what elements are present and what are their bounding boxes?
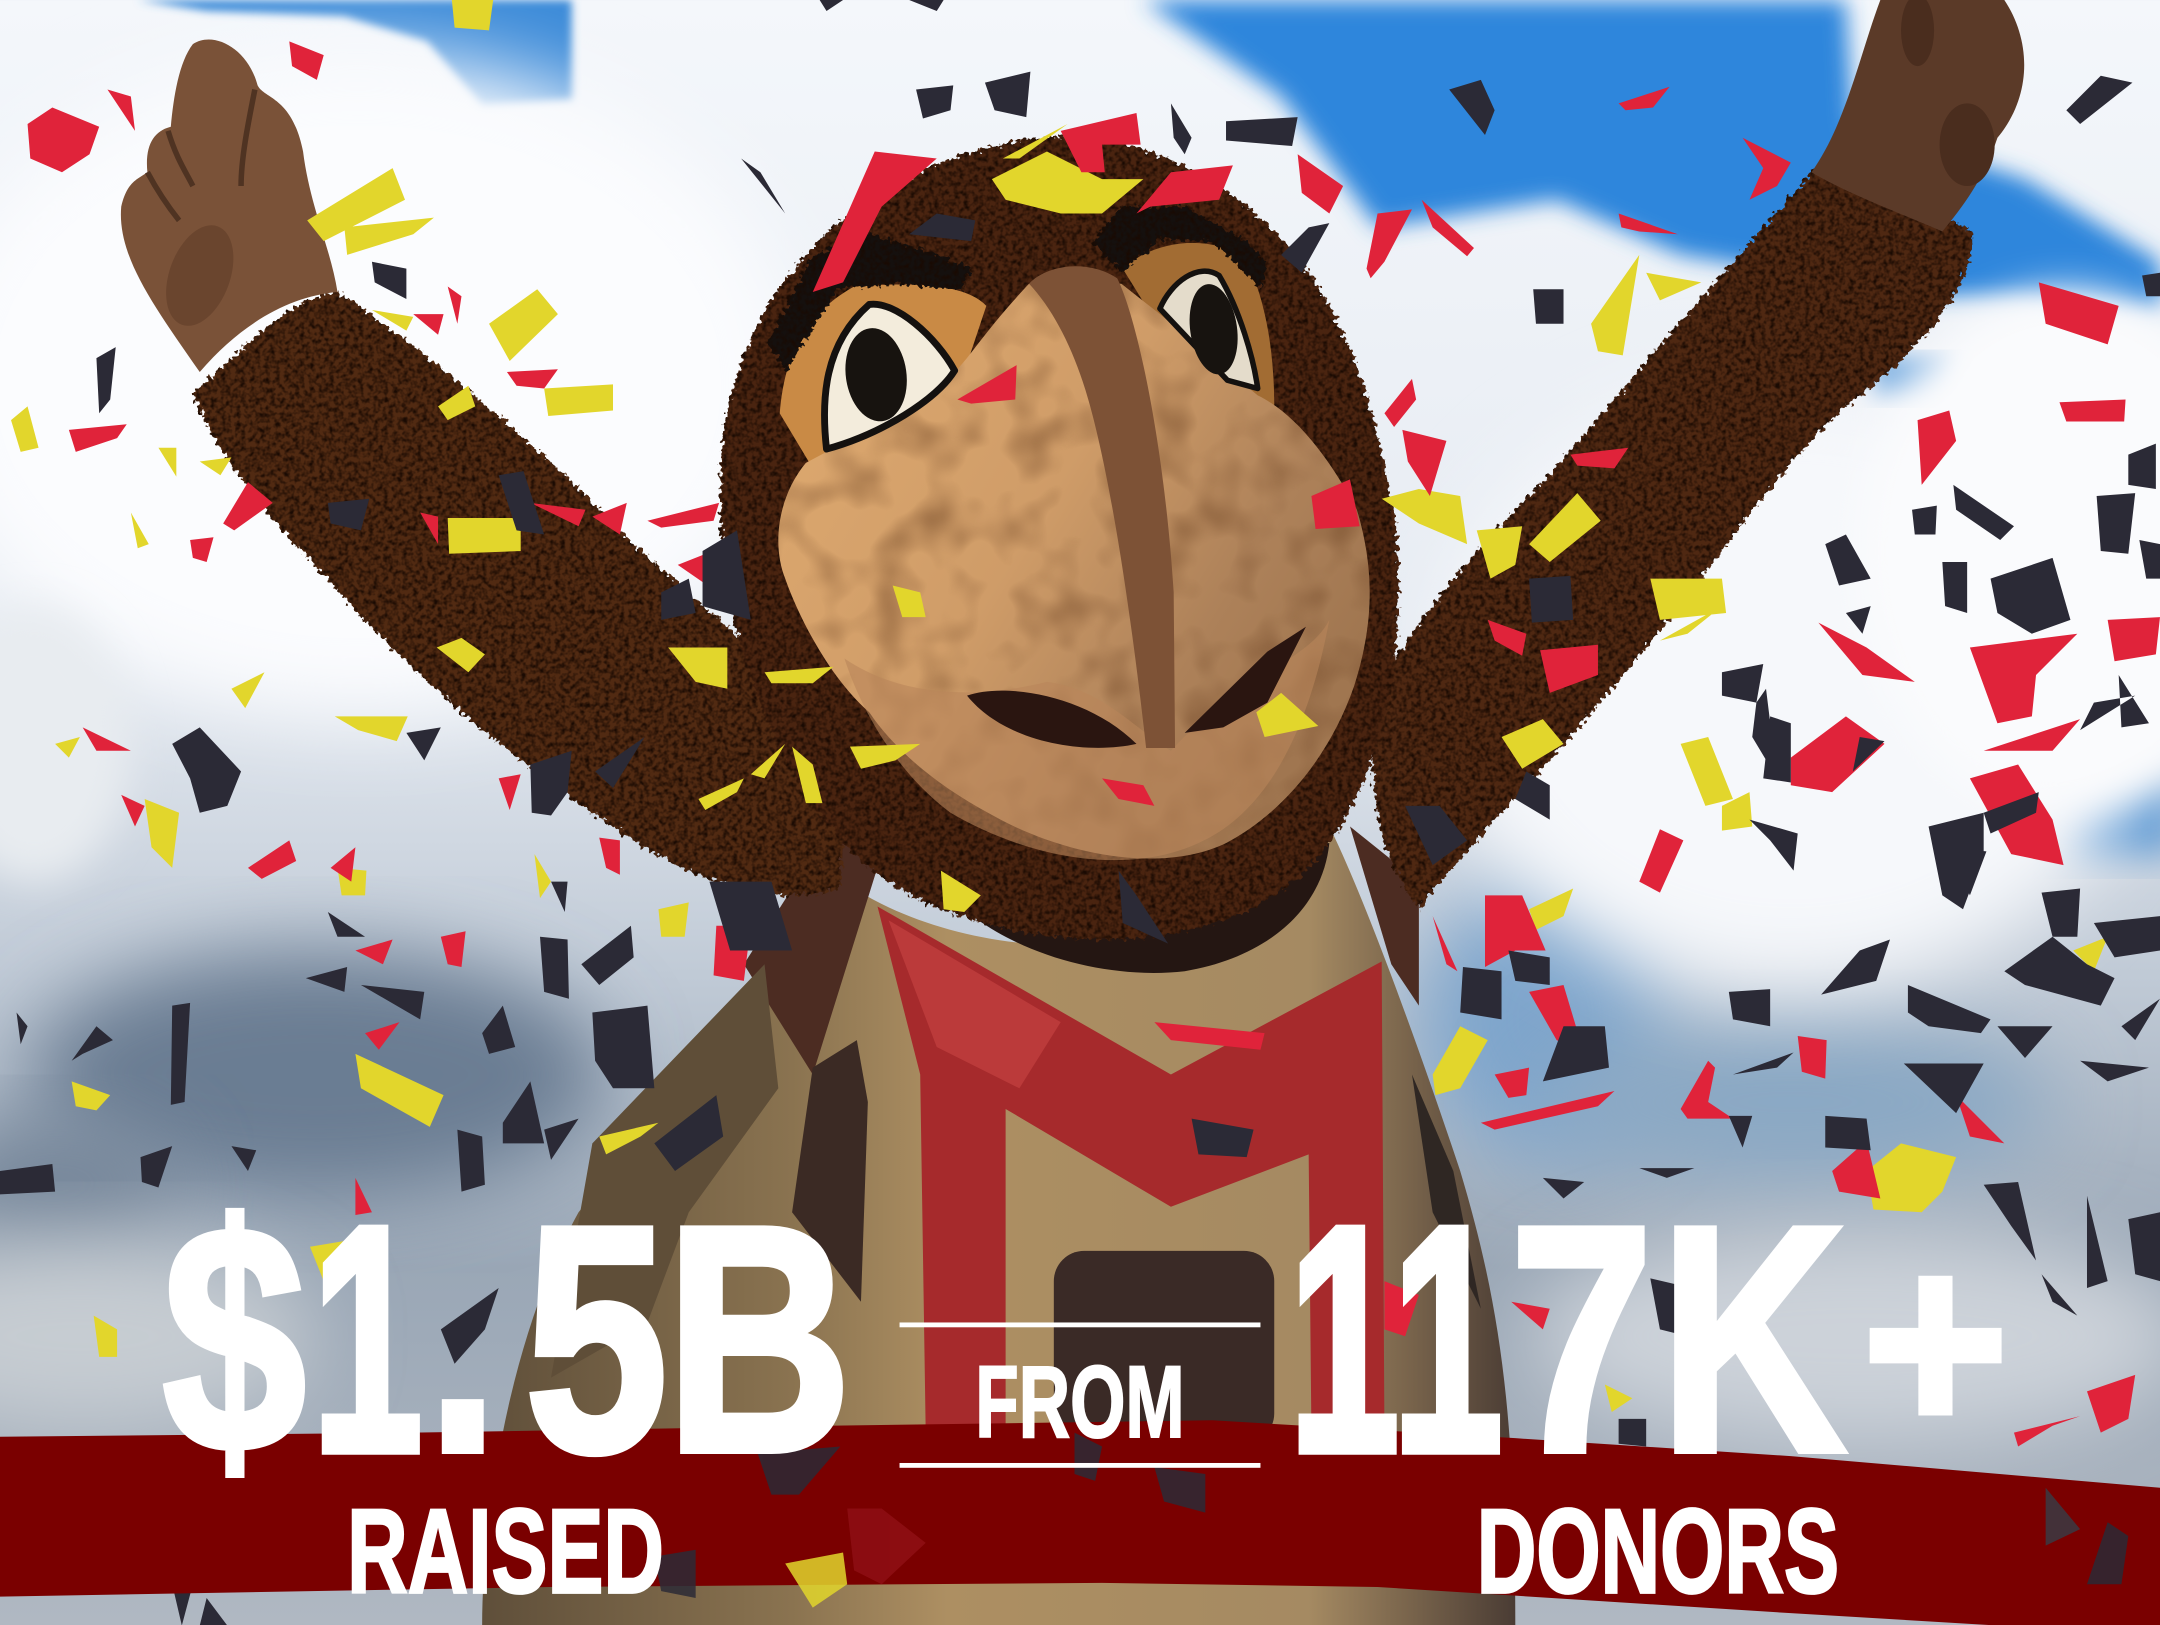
eyebrows	[767, 207, 1267, 371]
stat: donor count: 11	[1289, 1159, 1503, 1519]
label: donors: DONORS	[1477, 1485, 1839, 1618]
from connector: FROM	[975, 1345, 1185, 1459]
right hand	[1811, 0, 2024, 231]
stat: raised amount: 1	[312, 1159, 423, 1519]
mouth	[967, 627, 1306, 748]
plus sign: +	[1862, 1197, 2008, 1489]
mascot body and vest	[482, 813, 1515, 1625]
label: raised: RAISED	[347, 1485, 664, 1618]
stat: donor count: 7K	[1510, 1159, 1846, 1519]
red ribbon	[0, 1420, 2160, 1625]
stat: donor count	[1289, 1159, 1846, 1519]
right eye	[1160, 271, 1258, 388]
left arm	[193, 292, 847, 895]
left hand	[121, 39, 338, 372]
stat: raised amount: $	[163, 1159, 306, 1519]
stat: raised amount	[163, 1159, 852, 1519]
ribbon confetti	[654, 1433, 2128, 1608]
head	[720, 135, 1399, 939]
stat: raised amount: .5B	[427, 1159, 852, 1519]
beak and face	[778, 284, 1370, 859]
from connector	[900, 1322, 1260, 1468]
left eye	[824, 304, 955, 449]
right arm	[1372, 165, 1973, 909]
